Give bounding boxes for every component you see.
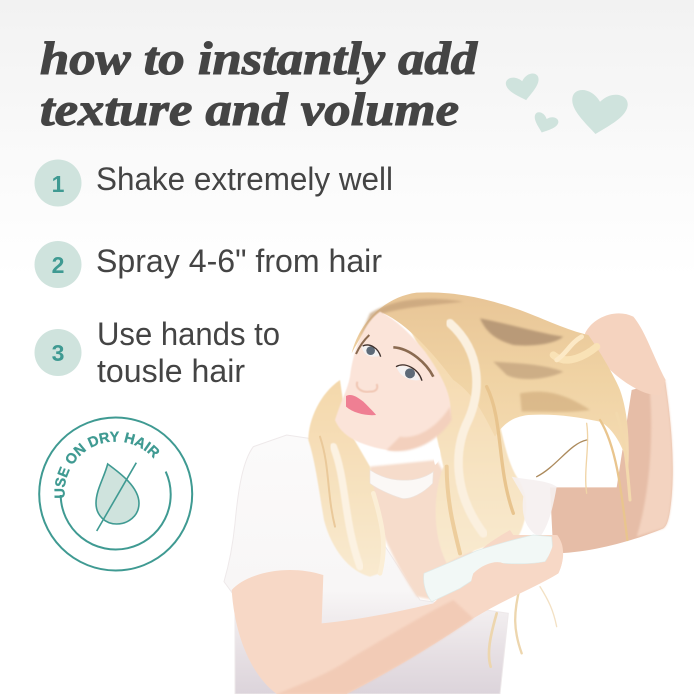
step 2 xyxy=(34,241,382,288)
raised arm xyxy=(550,380,673,553)
spray bottle xyxy=(424,535,553,602)
badge: use on dry hair xyxy=(38,416,194,572)
step 3 xyxy=(34,316,280,389)
lips xyxy=(346,395,376,415)
neck and chest xyxy=(370,460,473,600)
step 3: tousle hair xyxy=(97,353,245,389)
shirt xyxy=(224,435,508,694)
badge: use on dry hair: USE ON DRY HAIR xyxy=(54,431,160,498)
arm shadow xyxy=(277,600,473,694)
top hair xyxy=(352,292,629,467)
hand in hair xyxy=(585,313,666,395)
forearm highlight xyxy=(637,380,673,537)
hair root shadow xyxy=(480,318,563,346)
step 1: Shake extremely well xyxy=(96,161,393,197)
step 3: 3 xyxy=(52,340,64,366)
step 1: 1 xyxy=(52,171,65,197)
left hair xyxy=(308,380,384,577)
step 3: Use hands to xyxy=(97,316,280,352)
lower arm xyxy=(232,530,563,694)
photo: woman tousling hair xyxy=(224,292,673,694)
jaw shadow xyxy=(387,407,452,451)
title: texture and volume xyxy=(40,84,459,136)
step 2: 2 xyxy=(52,252,64,278)
fingers on bottle xyxy=(471,535,563,610)
icon: crossed-out water drop xyxy=(96,463,139,531)
nose shadow xyxy=(357,382,377,392)
title: how to instantly add xyxy=(40,33,479,85)
centre hair xyxy=(407,323,526,563)
earring xyxy=(434,445,440,465)
hair strands xyxy=(320,323,630,667)
title xyxy=(40,33,479,136)
choker xyxy=(370,470,433,499)
step 1 xyxy=(34,160,393,206)
face xyxy=(335,312,451,451)
eyes and brows xyxy=(356,335,433,381)
icon: hearts xyxy=(505,72,629,138)
sleeve of raised arm xyxy=(512,477,557,537)
step 2: Spray 4-6" from hair xyxy=(96,243,382,279)
